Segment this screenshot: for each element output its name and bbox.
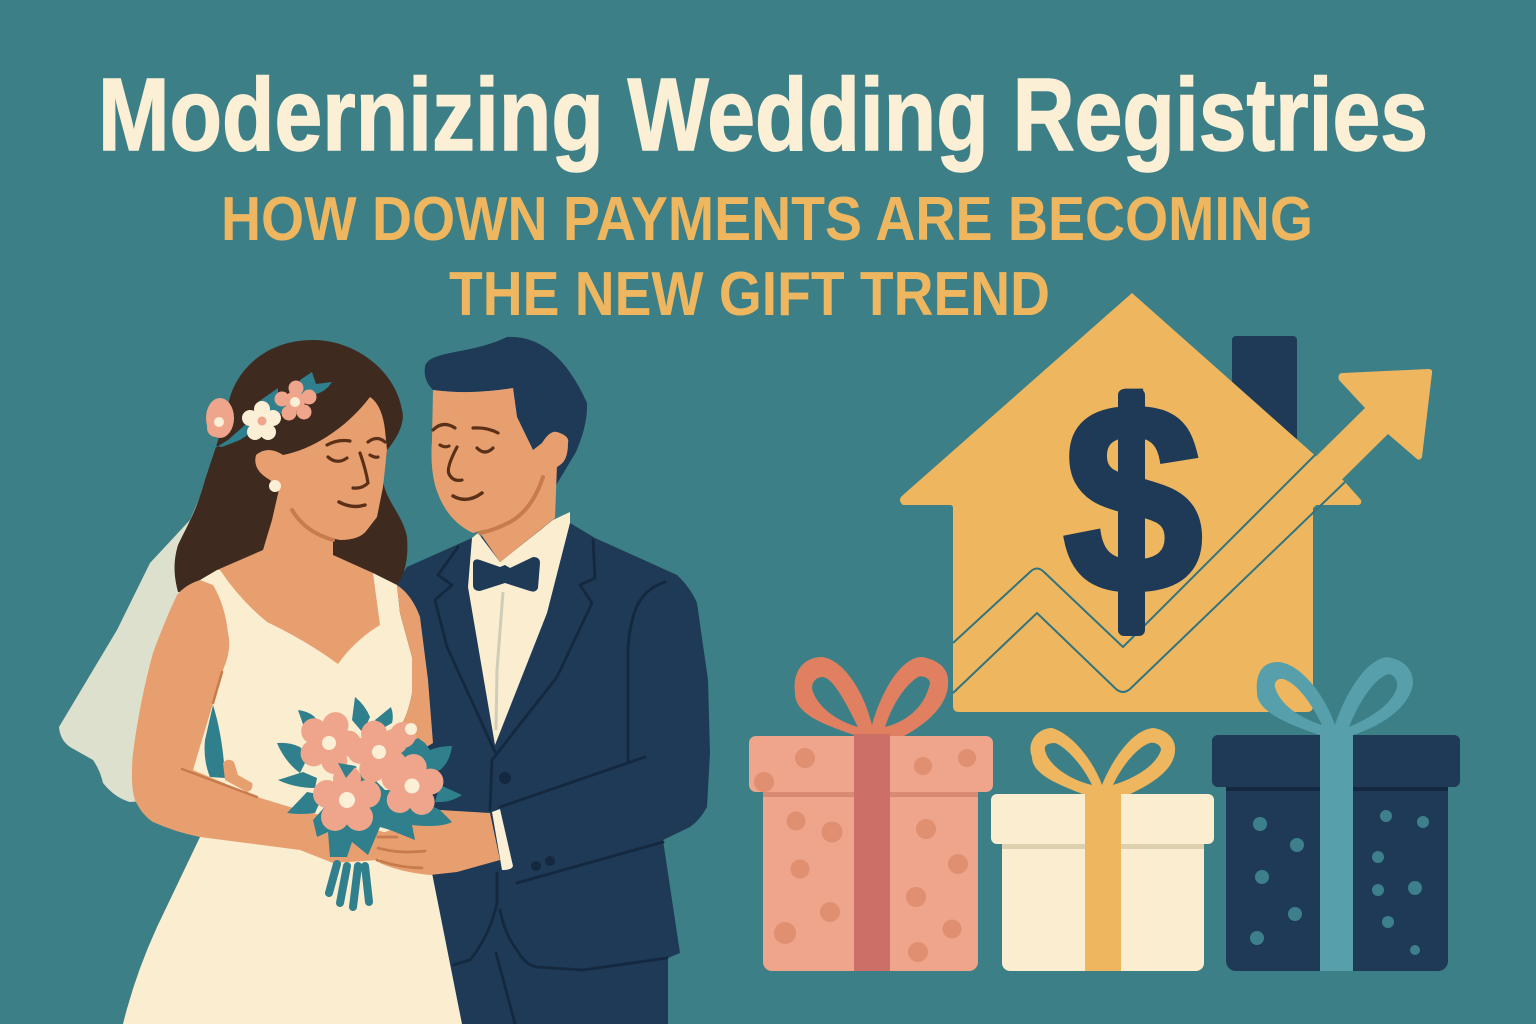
- groom jacket and trousers: [385, 523, 710, 1024]
- icon: rising arrow: [953, 369, 1432, 693]
- groom face details: [433, 424, 543, 533]
- bride left arm: [132, 580, 395, 863]
- bride face: [255, 397, 387, 540]
- subtitle: [221, 185, 1313, 329]
- subtitle: THE NEW GIFT TREND: [449, 260, 1050, 329]
- groom hair: [425, 337, 587, 487]
- bride flower crown: [200, 372, 332, 448]
- bride hair: [175, 340, 407, 592]
- bouquet leaves: [277, 697, 462, 857]
- icon: dollar sign: $: [1063, 349, 1203, 650]
- groom hand and cuff: [377, 809, 513, 875]
- groom bow tie: [473, 557, 540, 592]
- bouquet stems: [329, 864, 369, 907]
- groom neck: [480, 465, 557, 562]
- gift: cream box: [991, 728, 1214, 971]
- groom jacket seams: [435, 540, 667, 1024]
- bouquet flowers: [290, 702, 446, 831]
- bride right arm: [397, 585, 433, 760]
- groom head: [431, 388, 568, 533]
- groom hand at waist: [223, 760, 252, 792]
- illustration: house with dollar sign and rising arrow: [900, 293, 1432, 712]
- groom shirt: [468, 512, 570, 745]
- bride dress: [123, 570, 462, 1024]
- bride earring: [269, 480, 281, 492]
- bride face details: [292, 438, 385, 540]
- subtitle: HOW DOWN PAYMENTS ARE BECOMING: [221, 185, 1313, 254]
- bouquet: [277, 697, 462, 907]
- bride veil: [59, 443, 230, 802]
- illustration: bride: [123, 340, 462, 1024]
- arm creases: [182, 672, 257, 797]
- gift: navy box: [1212, 657, 1460, 971]
- bride neck and chest: [217, 485, 395, 670]
- gift: pink box: [749, 657, 993, 971]
- illustration: groom: [385, 337, 710, 1024]
- dress gap strip: [205, 705, 225, 778]
